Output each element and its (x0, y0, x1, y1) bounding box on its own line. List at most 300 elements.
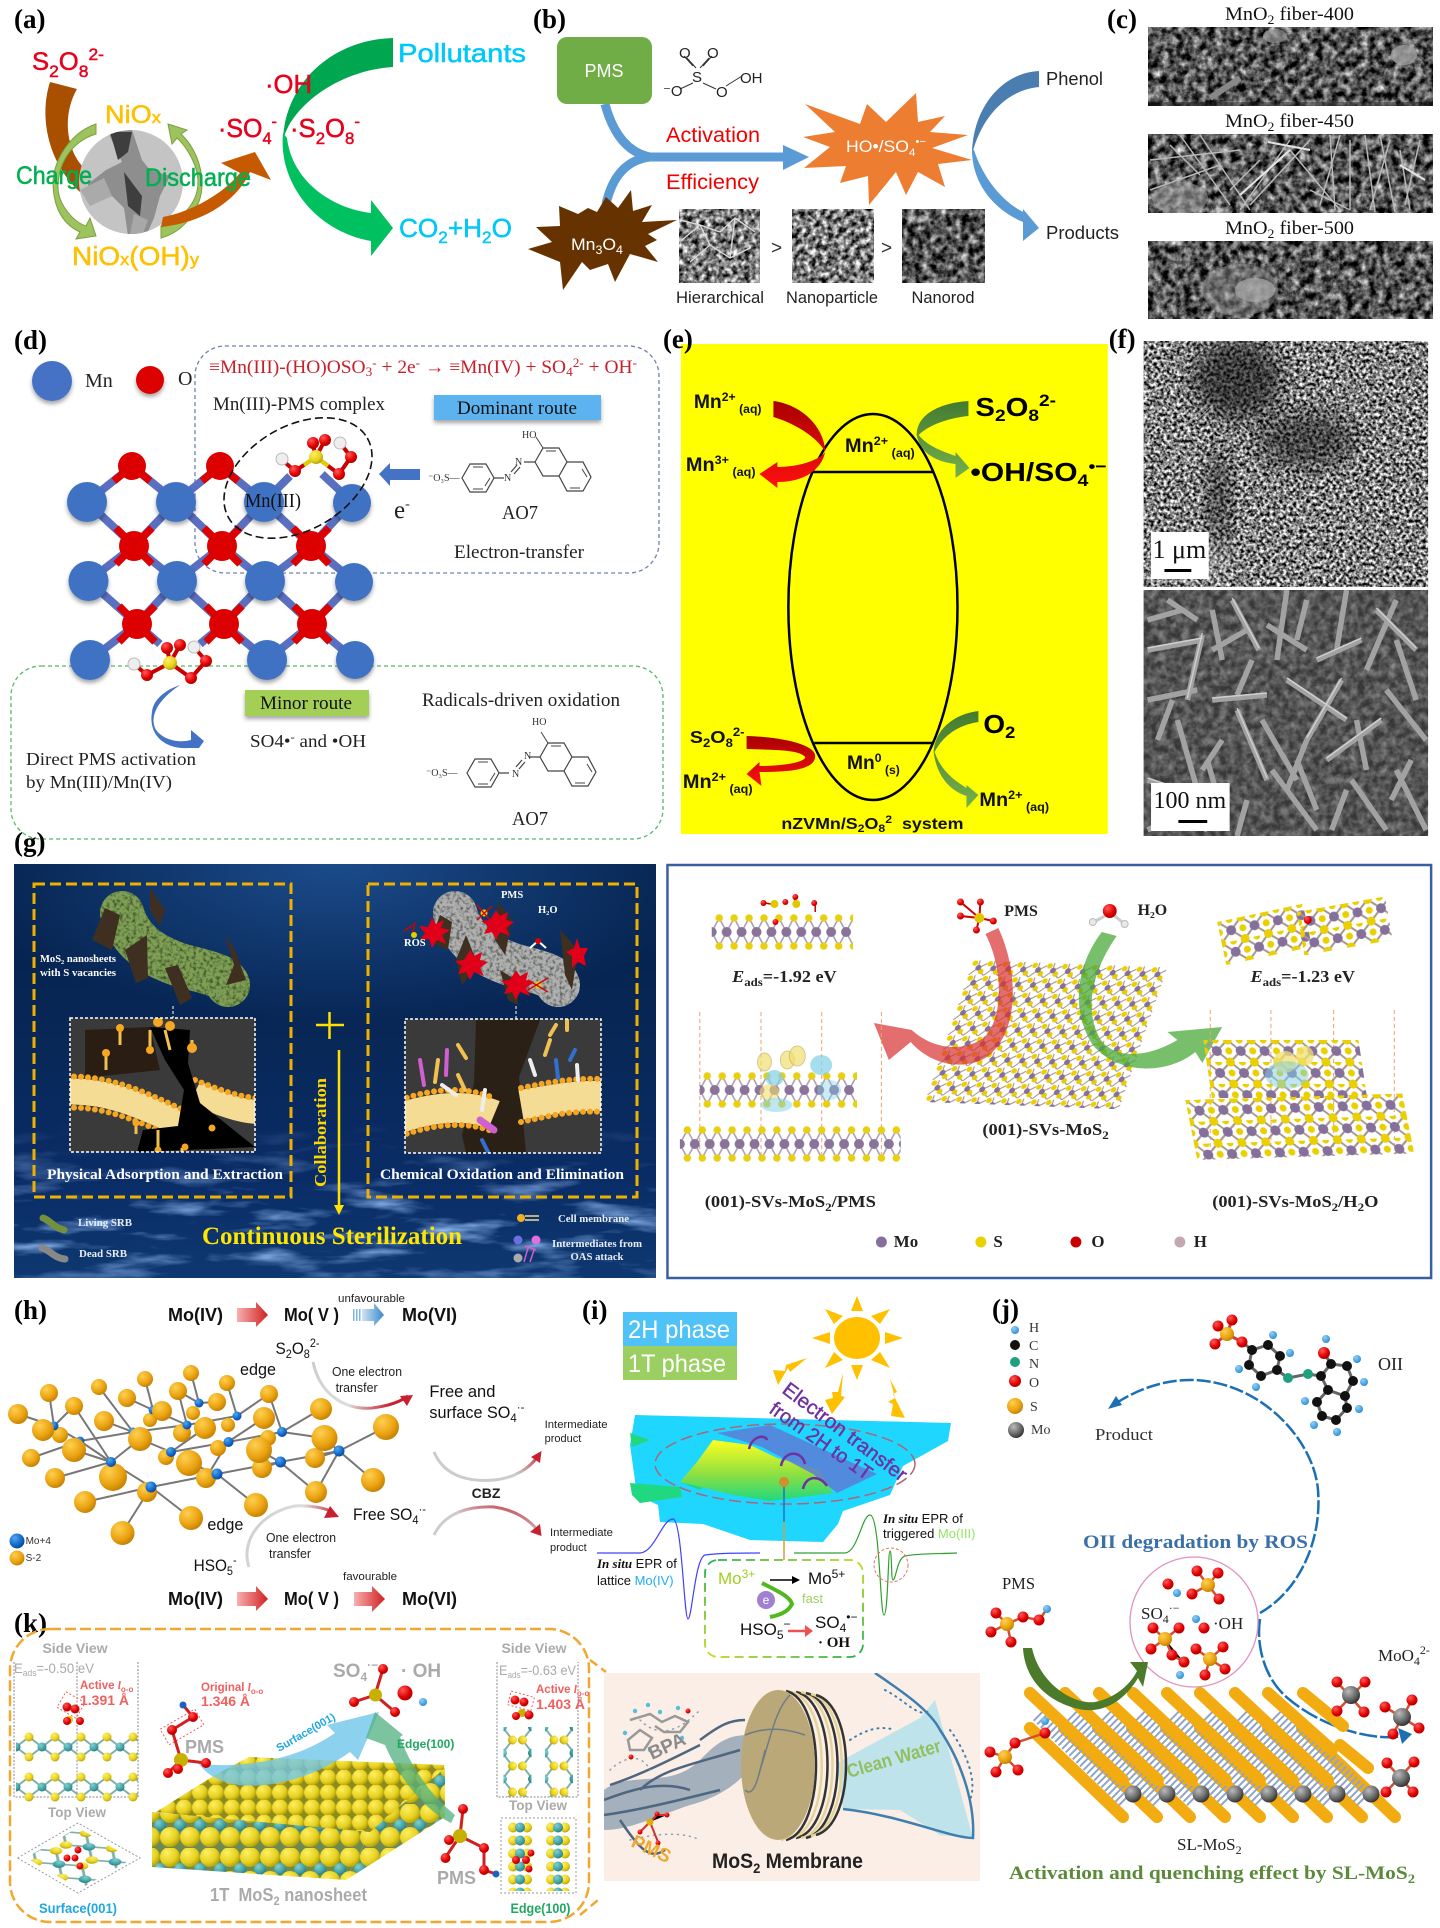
text S2O8 radical: 2 (316, 129, 325, 148)
arrow: radical output (161, 152, 271, 227)
OII molecule (1210, 1314, 1368, 1436)
molecule AO7 top: ⁻O₃S— (428, 473, 461, 484)
1.403: 1.403 Å (536, 1696, 585, 1712)
S2O8 small: S (690, 727, 702, 747)
dashed ellipse (655, 1424, 915, 1504)
S2O8 small: O (710, 727, 726, 747)
left slab lower (16, 1772, 138, 1802)
caption H2O: O (1364, 1192, 1378, 1211)
arc to intermediate top (434, 1451, 542, 1480)
icon cell membrane (517, 1214, 539, 1222)
Cell membrane label: Cell membrane (558, 1214, 629, 1225)
Mo3+ text: Mo (718, 1569, 742, 1588)
scale bar 100nm (1151, 783, 1230, 831)
label h: (h) (14, 1295, 47, 1325)
system caption: 8 (878, 823, 885, 835)
SO4 text: ·− (367, 1658, 378, 1672)
SEM nanorod (902, 209, 985, 283)
edge label bottom: edge (207, 1515, 243, 1534)
MoS2 rods lower layer (1030, 1728, 1395, 1817)
Efficiency label: Efficiency (666, 171, 760, 194)
green reaction arrow (1079, 932, 1222, 1068)
inset right: oxidation (400, 1019, 605, 1153)
Mn3+ text: (aq) (729, 465, 756, 479)
lightning bolts (773, 1358, 905, 1418)
Mn2+ bottom right: (aq) (1022, 800, 1049, 814)
atom legend: O (1029, 1376, 1039, 1391)
dashed quenching arc (1259, 1619, 1412, 1744)
MoS2 Membrane text: 2 (753, 1860, 760, 1876)
OII label: OII (1378, 1354, 1403, 1374)
S2O8 small: 2 (703, 736, 711, 750)
text SO4 radical: ·SO (218, 113, 264, 143)
Mn2+ text inside: (aq) (888, 446, 915, 460)
Mn2+ text top left: Mn (694, 392, 721, 413)
PMS structure: S (692, 69, 702, 86)
oxidation row bottom: Mo( V ) (284, 1589, 339, 1609)
product label top: product (545, 1433, 581, 1445)
text S2O8: S (32, 48, 49, 76)
Electron-transfer label: Electron-transfer (454, 542, 585, 563)
SEM hierarchical (679, 209, 760, 283)
EPR highlight circle (874, 1548, 908, 1582)
PMS molecule top (276, 434, 357, 480)
panel d: Mn(III)-PMS complex (11, 325, 663, 839)
H2O label: H₂O (538, 905, 557, 916)
title 450: 2 (1268, 119, 1274, 134)
molecule AO7 top: N (504, 473, 511, 484)
products molecules (349, 1664, 427, 1717)
1T legend: 1T phase (628, 1350, 726, 1378)
HSO5 text: HSO (740, 1620, 777, 1639)
radicals star: •− (915, 136, 926, 148)
caption PMS: (001)-SVs-MoS (705, 1192, 815, 1211)
panel c: MnO2 fibers SEM (1107, 4, 1433, 319)
probe stem (779, 1477, 789, 1561)
product label bottom: product (550, 1542, 587, 1554)
arrow: discharge cycle (161, 124, 202, 238)
EPR green curve (794, 1515, 957, 1615)
electron icon (757, 1591, 775, 1609)
S2O8 label: 8 (304, 1347, 310, 1361)
text NiOx: NiOx (105, 101, 162, 129)
text CO2+H2O: O (492, 213, 512, 243)
text S2O8 radical: ·S (290, 113, 316, 143)
PMS structure: ⁻O (663, 83, 683, 100)
caption PMS: 2 (825, 1200, 832, 1214)
central MoS2 lattice (925, 960, 1167, 1109)
label f: (f) (1109, 324, 1136, 354)
Free SO4 label: 4 (412, 1513, 419, 1527)
HSO5 text: 5 (777, 1628, 784, 1642)
legend Mo+4 (10, 1534, 51, 1548)
right slab guides (1210, 1010, 1394, 1150)
radicals star (803, 93, 972, 205)
title 500: 2 (1268, 226, 1274, 241)
radical molecules (1146, 1566, 1230, 1680)
dead bacterium with ROS (404, 902, 588, 1019)
green arrow bottom (934, 711, 978, 808)
Surface arrow text: Surface(001) (274, 1711, 338, 1755)
PMS text left: PMS (185, 1737, 224, 1757)
greater-than marks: > (771, 238, 782, 259)
OH radical label: ·OH (1213, 1614, 1243, 1633)
system caption: 2 (885, 814, 892, 826)
surface SO4 label: 4 (510, 1411, 517, 1425)
MoO4 label: MoO (1378, 1646, 1414, 1665)
living bacterium (92, 888, 246, 1018)
ball-and-stick lattice (8, 1365, 399, 1545)
Mn2+ bottom left: Mn (683, 772, 710, 793)
panel: MoS2 membrane (604, 1673, 980, 1881)
system caption: O (865, 816, 878, 833)
MoS2 rods top layer (1030, 1693, 1368, 1780)
molecule AO7 top: HO (522, 430, 536, 441)
block caption: 2 (273, 1894, 280, 1908)
MoO4 molecules (1332, 1676, 1424, 1798)
Products label: Products (1046, 223, 1119, 243)
PMS molecule left (160, 1702, 211, 1778)
SO4 text: 4 (360, 1670, 367, 1684)
label c: (c) (1107, 4, 1137, 34)
frame (667, 865, 1431, 1278)
radicals star: 4 (909, 147, 915, 159)
text Discharge: Discharge (145, 164, 251, 192)
legend atoms: S (993, 1232, 1003, 1251)
Mn3O4 star (528, 190, 677, 290)
SEM bottom nanorods (1144, 590, 1428, 836)
EPR label left: lattice Mo(IV) (597, 1573, 674, 1588)
SO4 text: •− (846, 1610, 857, 1624)
HSO5 text: − (784, 1617, 791, 1631)
Eads left: E (14, 1660, 23, 1676)
SO4 text: SO (333, 1661, 360, 1682)
radicals text: 4 (1078, 471, 1089, 490)
molecule AO7 bottom: N (512, 769, 519, 780)
SL-MoS2 label: SL-MoS (1177, 1835, 1236, 1854)
top right cluster (1217, 896, 1393, 965)
2H overlay (717, 1425, 877, 1493)
block front face (152, 1812, 370, 1880)
Eads right: ads (507, 1670, 521, 1680)
molecule AO7 bottom: HO (532, 717, 546, 728)
molecule AO7 bottom: N (524, 751, 531, 762)
Radicals label: Radicals-driven oxidation (422, 690, 621, 711)
Eads right: ads (1263, 975, 1282, 989)
label d: (d) (14, 325, 47, 355)
EPR label left (596, 1556, 677, 1588)
legend atoms: H (1194, 1232, 1207, 1251)
MoS2 Membrane text: Membrane (760, 1850, 863, 1873)
title 450: fiber-450 (1274, 111, 1354, 132)
S2O8 small: 2- (733, 725, 745, 739)
EPR label left: In situ EPR of (596, 1556, 677, 1571)
label g: (g) (14, 827, 45, 857)
legend S-2 (10, 1550, 42, 1566)
scale bar 100nm: 100 nm (1154, 788, 1227, 814)
SL-MoS2 label: 2 (1236, 1843, 1242, 1857)
text S2O8: 2- (88, 45, 104, 64)
MoO4 label: 2- (1420, 1643, 1430, 1657)
Mn3+ text: Mn (686, 455, 713, 476)
equation: + OH (584, 357, 633, 378)
scale bar 1um (1151, 532, 1209, 579)
red reaction arrow (874, 928, 1013, 1065)
CBZ label: CBZ (472, 1485, 501, 1501)
complex label: Mn(III)-PMS complex (213, 394, 385, 415)
arrow Phenol top (972, 71, 1039, 155)
fast label: fast (802, 1591, 823, 1606)
adsorbed PMS slab (700, 1069, 857, 1111)
side columns right (504, 1727, 573, 1797)
Dead SRB label: Dead SRB (79, 1248, 128, 1260)
PMS membrane text: PMS (628, 1831, 674, 1868)
equation: + 2e (377, 357, 416, 378)
Edge arrow text: Edge(100) (397, 1737, 454, 1751)
inset left: extraction (60, 1017, 260, 1154)
left slab guides (700, 1012, 881, 1160)
text SO4 radical: 4 (262, 129, 272, 148)
right slab lower (1185, 1093, 1414, 1160)
Free SO4 label: Free SO (353, 1505, 417, 1524)
Surface(001) label: Surface(001) (39, 1900, 117, 1916)
surface SO4 label: ·- (517, 1400, 524, 1414)
radical species label: SO4• (250, 731, 288, 751)
HSO5 label: 5 (227, 1564, 233, 1578)
dashed box right (368, 884, 637, 1197)
text Pollutants: Pollutants (398, 38, 526, 68)
oxidation row bottom: Mo(VI) (402, 1589, 457, 1609)
Activation label: Activation (666, 124, 760, 147)
adsorbate left (57, 1692, 85, 1725)
equation: → ≡Mn(IV) + SO (420, 357, 566, 378)
red arrow (788, 1625, 813, 1637)
Eads left: =-0.50 eV (36, 1660, 95, 1676)
Direct PMS label: Direct PMS activation (26, 749, 196, 769)
PMS molecule lower (984, 1717, 1050, 1778)
panel i: 2H/1T phase (582, 1295, 980, 1881)
Mn3O4 star: 4 (616, 243, 623, 257)
panel j: SL-MoS2 (984, 1294, 1430, 1886)
atom legend (1007, 1321, 1050, 1438)
HSO5 label: HSO (194, 1556, 230, 1575)
Mn(III) label: Mn(III) (245, 490, 301, 512)
top view right cells (501, 1818, 576, 1893)
bottom caption: Activation and quenching effect by SL-MoS (1009, 1863, 1364, 1884)
label a: (a) (14, 4, 45, 34)
BPA text: BPA (645, 1729, 689, 1765)
downward arrow (334, 1050, 344, 1215)
from 2H to 1T text: from 2H to 1T (765, 1398, 876, 1485)
PMS structure: O (707, 45, 719, 62)
EPR label right: In situ EPR of (882, 1511, 963, 1526)
surface SO4 label: surface SO (429, 1403, 514, 1422)
label j: (j) (992, 1294, 1019, 1324)
S2O8 label: O (292, 1339, 304, 1358)
molecule AO7 bottom: ⁻O₃S— (426, 768, 459, 779)
text SO4 radical: - (272, 112, 277, 131)
plus sign (316, 1012, 344, 1039)
equation: 4 (566, 364, 573, 379)
Original label: o-o (251, 1687, 263, 1696)
caption PMS: /PMS (831, 1192, 876, 1211)
intermediate label bottom: Intermediate (550, 1527, 613, 1539)
panel g left: sterilization scheme (14, 827, 656, 1278)
EPR blue curve (597, 1519, 760, 1619)
PMS molecule upper (986, 1605, 1051, 1648)
bottom caption: 2 (1408, 1871, 1415, 1886)
Eads left: ads (744, 975, 763, 989)
legend Mn: Mn (85, 370, 113, 392)
PMS label: PMS (1002, 1574, 1035, 1593)
system caption: nZVMn/S (781, 816, 849, 833)
SEM nanoparticle (792, 209, 874, 283)
BPA molecule (623, 1703, 690, 1760)
title 400: fiber-400 (1274, 4, 1354, 25)
S2O8 large: 2 (995, 406, 1006, 425)
Hierarchical label: Hierarchical (676, 288, 764, 307)
unfavourable label: unfavourable (338, 1293, 405, 1305)
radical species label: - (291, 730, 295, 744)
text S2O8: O (59, 48, 79, 76)
O2: O (983, 711, 1003, 739)
icon living SRB (43, 1218, 64, 1230)
OAS label: OAS attack (570, 1252, 624, 1263)
Mn3O4 star: Mn (571, 235, 595, 254)
H2O charge density (1265, 1046, 1314, 1089)
Active right: Active l (536, 1684, 577, 1696)
S2O8 label: 2 (286, 1347, 292, 1361)
Mn2+ bottom left: (aq) (726, 782, 753, 796)
PMS text: PMS (1004, 903, 1038, 920)
legend Mo+4: Mo+4 (26, 1536, 51, 1547)
legend atoms: Mo (894, 1232, 918, 1251)
PMS membrane molecule (638, 1812, 670, 1846)
ROS label: ROS (404, 938, 426, 949)
mechanism box (705, 1560, 863, 1657)
cell right (497, 1662, 578, 1797)
inset right border (405, 1019, 601, 1153)
S2O8 large: S (975, 394, 993, 422)
oxidation row top: Mo(VI) (402, 1305, 457, 1325)
transfer label top: transfer (336, 1381, 378, 1395)
molecule AO7 top (428, 430, 591, 492)
sun (812, 1296, 903, 1380)
PMS molecule bottom (128, 639, 212, 684)
Chemical caption: Chemical Oxidation and Elimination (380, 1167, 625, 1183)
S2O8 large: 8 (1028, 406, 1039, 425)
by Mn label: by Mn(III)/Mn(IV) (26, 772, 172, 793)
Clean Water text: Clean Water (845, 1736, 944, 1783)
legend Mn (32, 361, 113, 401)
Mo5+ text: Mo (808, 1569, 832, 1588)
minor route tag: Minor route (260, 693, 352, 714)
caption H2O: 2 (1358, 1200, 1364, 1214)
legend atoms (876, 1232, 1207, 1251)
intermediate label top: Intermediate (545, 1419, 608, 1431)
left slab upper (16, 1732, 138, 1762)
SEM top needles (1144, 340, 1428, 587)
Side View right: Side View (501, 1640, 567, 1656)
SO4 radical label: SO (1141, 1604, 1163, 1623)
Original label: Original l (201, 1682, 251, 1694)
Eads right: =-0.63 eV (521, 1662, 577, 1678)
green edge arrow (366, 1712, 455, 1823)
Top View right: Top View (509, 1798, 567, 1813)
Mn0: (s) (882, 763, 900, 777)
dominant route box (195, 346, 659, 573)
Nanorod label: Nanorod (912, 288, 974, 307)
system caption: system (892, 816, 963, 833)
Mn2+ text top left: (aq) (736, 402, 762, 416)
Mn2+ text inside: Mn (845, 436, 872, 457)
S vacancies label: with S vacancies (40, 968, 116, 979)
electron transfer green arrow (762, 1583, 792, 1617)
dominant route tag: Dominant route (457, 398, 577, 419)
Mn3O4 star: 3 (595, 243, 603, 257)
S2O8 label: 2- (310, 1336, 320, 1350)
MoS2 sheet (630, 1415, 951, 1542)
ocean background (14, 864, 656, 1278)
green activation arrow (1023, 1648, 1148, 1710)
OH text: · OH (401, 1661, 441, 1682)
minor route tag (245, 690, 369, 716)
molecule AO7 top: N (515, 457, 522, 468)
Intermediates label: Intermediates from (552, 1239, 642, 1250)
OII degradation text: OII degradation by ROS (1083, 1532, 1308, 1553)
atom legend: H (1029, 1321, 1039, 1336)
Mo arrow (770, 1576, 800, 1584)
adsorbate right (508, 1691, 534, 1720)
equation: ≡Mn(III)-(HO)OSO (209, 357, 362, 378)
system caption: 2 (858, 823, 865, 835)
text Charge: Charge (16, 162, 92, 190)
title 400: MnO (1225, 4, 1265, 25)
dashed frame (10, 1629, 589, 1922)
S2O8 large: O (1006, 394, 1028, 422)
legend atoms: O (1091, 1232, 1104, 1251)
MoS2 Membrane text: MoS (712, 1850, 756, 1873)
Eads right: =-1.23 eV (1281, 967, 1356, 986)
PMS structure: O (716, 84, 728, 101)
Electron transfer text: Electron transfer (778, 1378, 911, 1486)
Free and label: Free and (429, 1382, 495, 1401)
Living SRB label: Living SRB (78, 1217, 133, 1229)
PMS structure (663, 45, 762, 101)
Continuous Sterilization: Continuous Sterilization (202, 1223, 462, 1250)
text OH radical: ·OH (265, 69, 312, 99)
Mn3+ text: 3+ (715, 453, 729, 467)
big arrow top (283, 38, 393, 140)
panel h: MoS2 persulfate pathways (8, 1293, 613, 1612)
catalyst TEM circle (79, 130, 183, 236)
curved activation arrow (151, 685, 204, 748)
connector dashes (580, 1660, 606, 1915)
oxidation row bottom (168, 1586, 457, 1612)
Mn0: 0 (875, 751, 882, 765)
dashed ellipse Mn(III) (203, 393, 393, 563)
HSO5 label: - (233, 1553, 237, 1567)
electron icon: e (763, 1593, 770, 1607)
blue surface arrow (198, 1712, 379, 1786)
dashed box left (34, 884, 291, 1197)
Mn2+ bottom left: 2+ (712, 770, 726, 784)
Mn2+ bottom right: 2+ (1008, 788, 1022, 802)
Mo balls (1124, 1786, 1380, 1802)
PMS on top-left slab (760, 894, 817, 925)
Mn2+ bottom right: Mn (979, 790, 1007, 811)
Active right: o-o (577, 1689, 589, 1698)
